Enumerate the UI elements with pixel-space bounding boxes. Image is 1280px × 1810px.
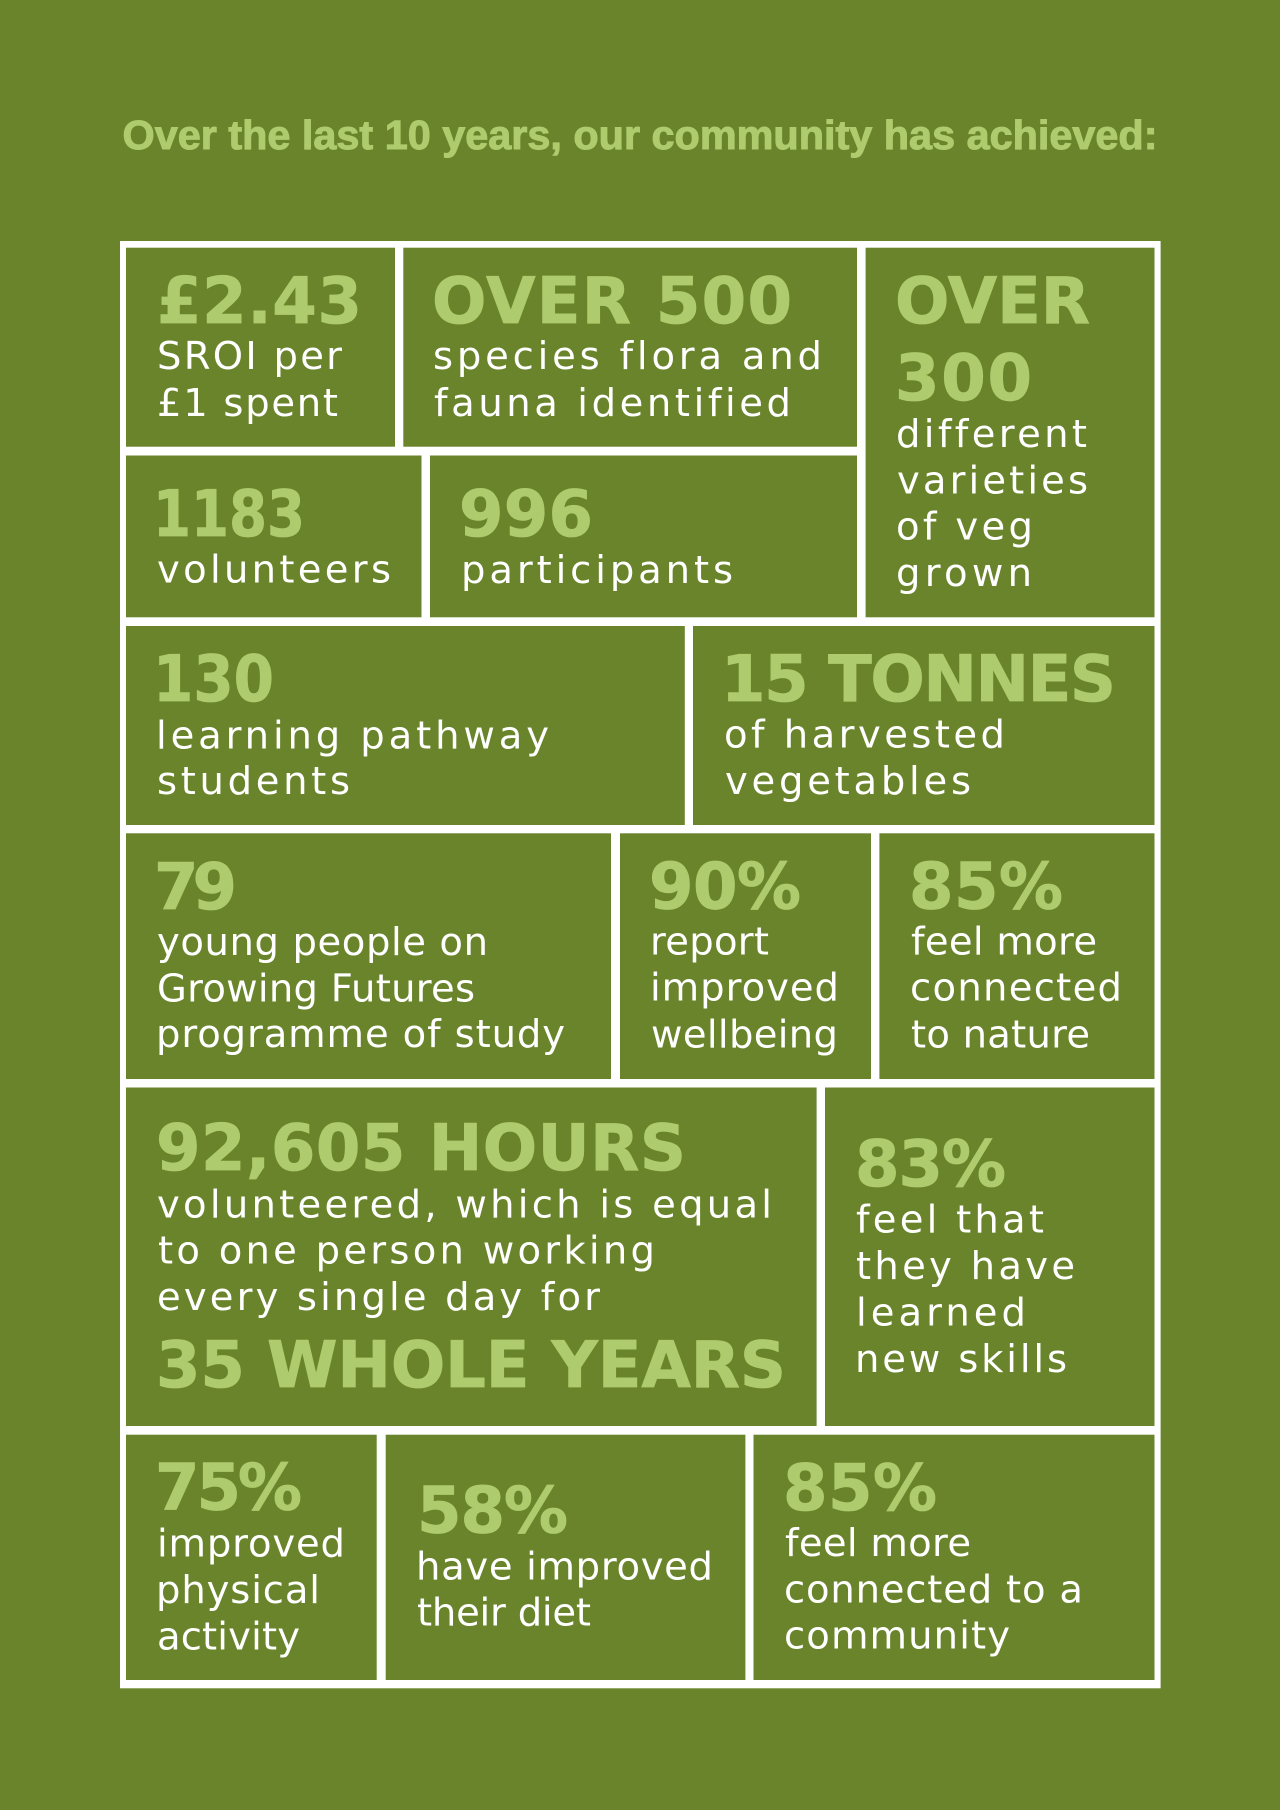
stat value: 79 xyxy=(154,851,237,925)
stat value: 58% xyxy=(417,1474,568,1548)
description: learning pathway xyxy=(156,713,549,758)
description: feel more xyxy=(785,1521,971,1566)
panel: connected to nature xyxy=(879,833,1154,1079)
description: varieties xyxy=(897,459,1088,504)
description: have improved xyxy=(416,1544,713,1589)
stat value: 90% xyxy=(649,850,801,924)
description: species flora and xyxy=(433,334,822,379)
description: they have xyxy=(856,1244,1075,1289)
description xyxy=(157,1183,772,1320)
description: feel that xyxy=(856,1198,1044,1243)
panel: participants xyxy=(430,456,857,617)
panel: species xyxy=(403,248,857,447)
description: connected to a xyxy=(784,1567,1083,1612)
panel: volunteers xyxy=(126,456,422,617)
description: community xyxy=(784,1614,1010,1659)
panel: wellbeing xyxy=(620,833,871,1079)
description xyxy=(910,919,1122,1057)
stat value: 300 xyxy=(895,342,1032,416)
stat value: £2.43 xyxy=(157,265,362,339)
panel: volunteer hours xyxy=(126,1088,817,1426)
description xyxy=(156,713,549,804)
description: feel more xyxy=(911,919,1097,964)
description: volunteered, which is equal xyxy=(157,1183,772,1228)
description xyxy=(724,713,1005,804)
stat value: 92,605 HOURS xyxy=(156,1112,686,1186)
stat value: 1183 xyxy=(153,478,305,552)
panel: connected to a community xyxy=(754,1435,1154,1680)
description: new skills xyxy=(855,1337,1067,1382)
description: vegetables xyxy=(725,759,971,804)
stat value: 15 TONNES xyxy=(721,643,1116,717)
description: of harvested xyxy=(724,713,1005,758)
description: volunteers xyxy=(157,548,391,593)
title: Over the last 10 years, our community has achieved: xyxy=(122,112,1158,158)
panel: improved diet xyxy=(386,1435,745,1680)
description xyxy=(896,412,1088,596)
description: SROI per xyxy=(157,334,342,379)
description: learned xyxy=(856,1291,1026,1336)
stat value: 75% xyxy=(155,1452,302,1526)
description: programme of study xyxy=(156,1012,565,1057)
stat value: 85% xyxy=(783,1452,937,1526)
description: improved xyxy=(157,1522,345,1567)
stat value: 85% xyxy=(909,850,1063,924)
description xyxy=(784,1521,1083,1659)
description: of veg xyxy=(896,504,1033,550)
stat value: 83% xyxy=(855,1128,1006,1202)
panel: young people xyxy=(126,833,611,1079)
description: grown xyxy=(896,551,1032,596)
description xyxy=(433,334,822,426)
description: their diet xyxy=(417,1591,591,1636)
description xyxy=(157,334,342,426)
panel: learning pathway students xyxy=(126,626,685,825)
panel: veg varieties xyxy=(866,248,1154,617)
panel: physical activity xyxy=(126,1435,377,1680)
description xyxy=(156,1522,345,1659)
stat value: 996 xyxy=(459,478,593,552)
description: students xyxy=(157,759,350,804)
stat value: OVER xyxy=(895,265,1090,339)
stat value xyxy=(895,265,1090,416)
description: Growing Futures xyxy=(157,966,475,1012)
statistics grid xyxy=(120,241,1161,1688)
description: participants xyxy=(461,548,733,593)
description: to nature xyxy=(911,1012,1090,1057)
description: every single day for xyxy=(157,1275,600,1320)
description: improved xyxy=(650,966,839,1011)
description xyxy=(855,1198,1075,1382)
description: fauna identified xyxy=(434,381,791,426)
description: different xyxy=(896,412,1087,457)
description: connected xyxy=(910,966,1122,1011)
description xyxy=(650,919,839,1057)
panel: harvested vegetables xyxy=(693,626,1154,825)
description: physical xyxy=(156,1568,320,1613)
description: activity xyxy=(157,1614,300,1659)
panel: SROI xyxy=(126,248,395,447)
description: to one person working xyxy=(158,1228,655,1274)
description: report xyxy=(650,919,769,964)
description xyxy=(156,920,565,1057)
stat value: OVER 500 xyxy=(432,265,792,339)
description: young people on xyxy=(157,920,488,965)
stat value: 130 xyxy=(153,643,274,717)
description xyxy=(416,1544,713,1636)
description: wellbeing xyxy=(651,1012,838,1057)
description: £1 spent xyxy=(157,381,338,426)
stat value: whole years: 35 WHOLE YEARS xyxy=(156,1329,786,1403)
panel: new skills xyxy=(825,1088,1154,1426)
